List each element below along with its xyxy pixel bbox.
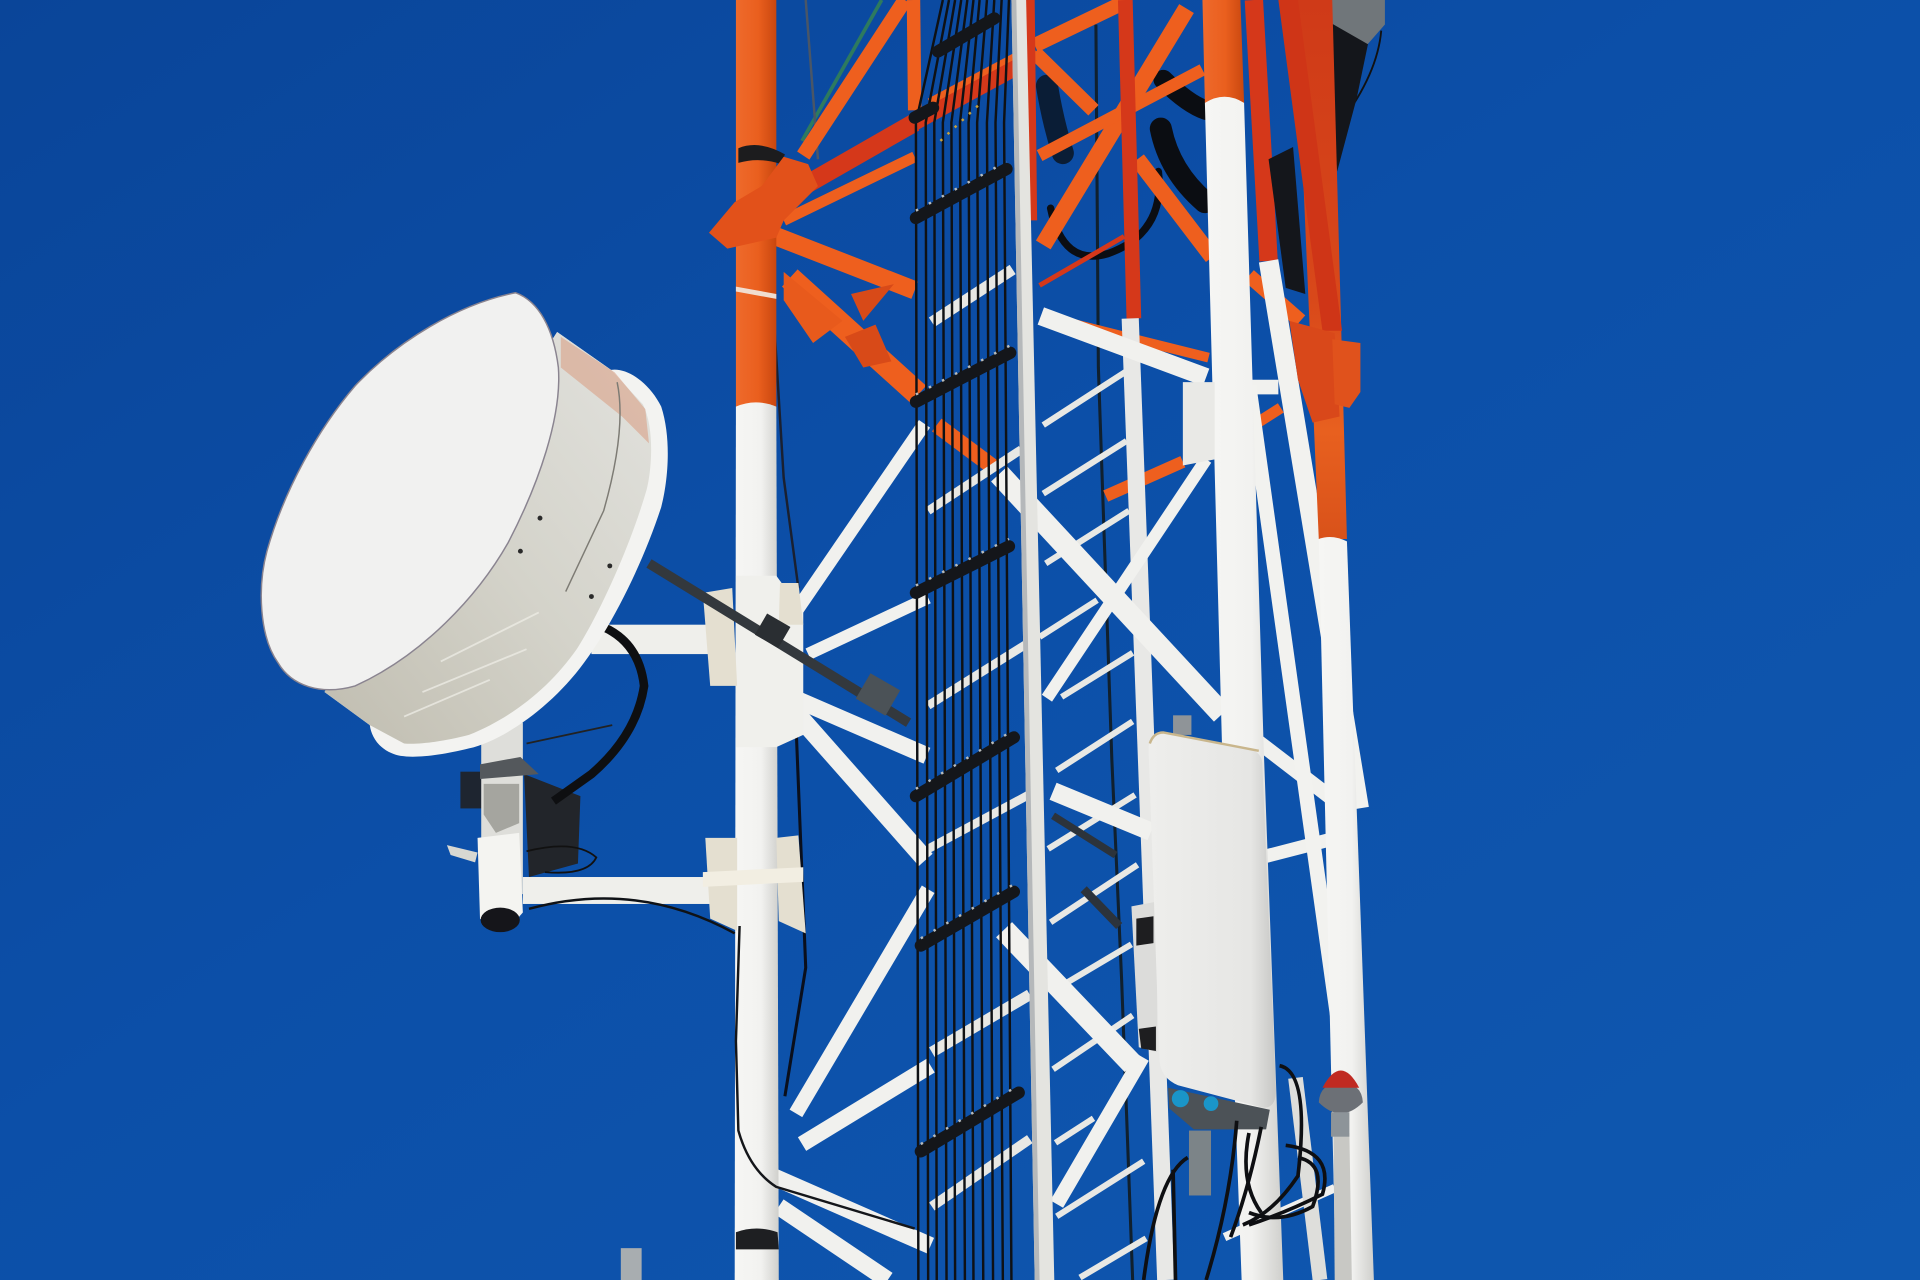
cable along pole [736, 926, 915, 1229]
upper horizontal arm [591, 625, 710, 654]
blue connector left [1172, 1090, 1189, 1107]
sector antenna panel [1131, 715, 1325, 1280]
orange reflection [561, 337, 649, 443]
upper right clamp [779, 583, 803, 625]
orange gusset plate [709, 157, 818, 249]
seam line [566, 382, 620, 592]
cable tangle [1144, 1066, 1325, 1280]
cables along lower arm [529, 898, 735, 933]
dark ring at base [736, 1229, 779, 1249]
radio box vents [1136, 916, 1156, 1051]
grey cylinder [1189, 1131, 1211, 1195]
light streaks on drum [404, 612, 539, 717]
side bracket [447, 845, 478, 862]
pale strap [736, 287, 776, 299]
bracket arm behind collar [703, 867, 803, 887]
vertical cable bundle [915, 0, 1019, 1280]
orange bracket [1332, 339, 1360, 408]
dark gearbox [524, 774, 580, 877]
white lattice members [771, 316, 1337, 1280]
black jumper cable [553, 627, 644, 801]
thin tie rod [527, 725, 612, 744]
orange brace gusset plates [784, 272, 894, 367]
orange section [1202, 0, 1244, 103]
tube opening [481, 908, 520, 932]
side radio box [1131, 902, 1157, 1052]
microwave dish antenna [261, 293, 668, 757]
orange section [1296, 0, 1347, 539]
red beacon light [1319, 1071, 1363, 1280]
white collar [736, 576, 803, 747]
orange section [736, 0, 776, 407]
ladder rungs [928, 269, 1146, 1278]
dark red main beams [771, 0, 1269, 318]
leg junction plate [1183, 382, 1215, 465]
white section [735, 402, 779, 1280]
left tower pole [709, 0, 915, 1280]
equipment at top right [1269, 0, 1385, 294]
upper clamp [703, 588, 737, 686]
stub post at bottom [621, 1248, 642, 1280]
lower horizontal arm [523, 877, 713, 904]
strut end fitting [856, 673, 900, 716]
white section [1319, 537, 1374, 1280]
blue connector right [1204, 1096, 1218, 1111]
clamp clusters [915, 18, 1019, 1151]
drum body [324, 332, 651, 744]
lower left clamp [705, 838, 737, 931]
far right tower leg [1278, 0, 1374, 1280]
vertical mount pole [481, 723, 523, 894]
main right tower leg [1183, 0, 1283, 1280]
grey radio box [1298, 0, 1385, 44]
rivet holes [518, 516, 612, 599]
clamp block [460, 772, 482, 808]
centre ladder rail [1011, 0, 1054, 1280]
yellow highlights on clamp studs [940, 104, 980, 141]
black band [738, 145, 785, 164]
base connectors [1168, 1088, 1270, 1129]
cable lines [916, 0, 1011, 1280]
inner white diagonal legs [1249, 261, 1359, 1280]
dish mount and brackets [447, 563, 909, 933]
orange diagonal braces [776, 0, 1300, 496]
worn paint patch [484, 784, 519, 833]
strut clamp [755, 613, 790, 648]
white face [261, 293, 559, 690]
white section [1205, 97, 1283, 1280]
beige top edge [1150, 732, 1259, 751]
orange upper lattice [771, 0, 1300, 496]
outer rim [324, 332, 668, 757]
dark cable loops behind lattice [1047, 80, 1206, 256]
lower right clamp [776, 835, 806, 933]
coax cable loop [527, 846, 596, 873]
dark gear between legs [1269, 147, 1305, 294]
top cap knob [1173, 715, 1191, 735]
orange gear block [1289, 321, 1340, 423]
dark radio housings [1329, 22, 1369, 171]
panel body [1149, 732, 1276, 1108]
white end tube [478, 833, 523, 928]
dark strut and tab [1053, 816, 1119, 926]
black support strut [649, 563, 909, 723]
red strut [1278, 0, 1342, 331]
thin wires behind the tower [774, 0, 1381, 1280]
dark clamp band [480, 757, 539, 779]
clamp bolts [916, 162, 1019, 1144]
